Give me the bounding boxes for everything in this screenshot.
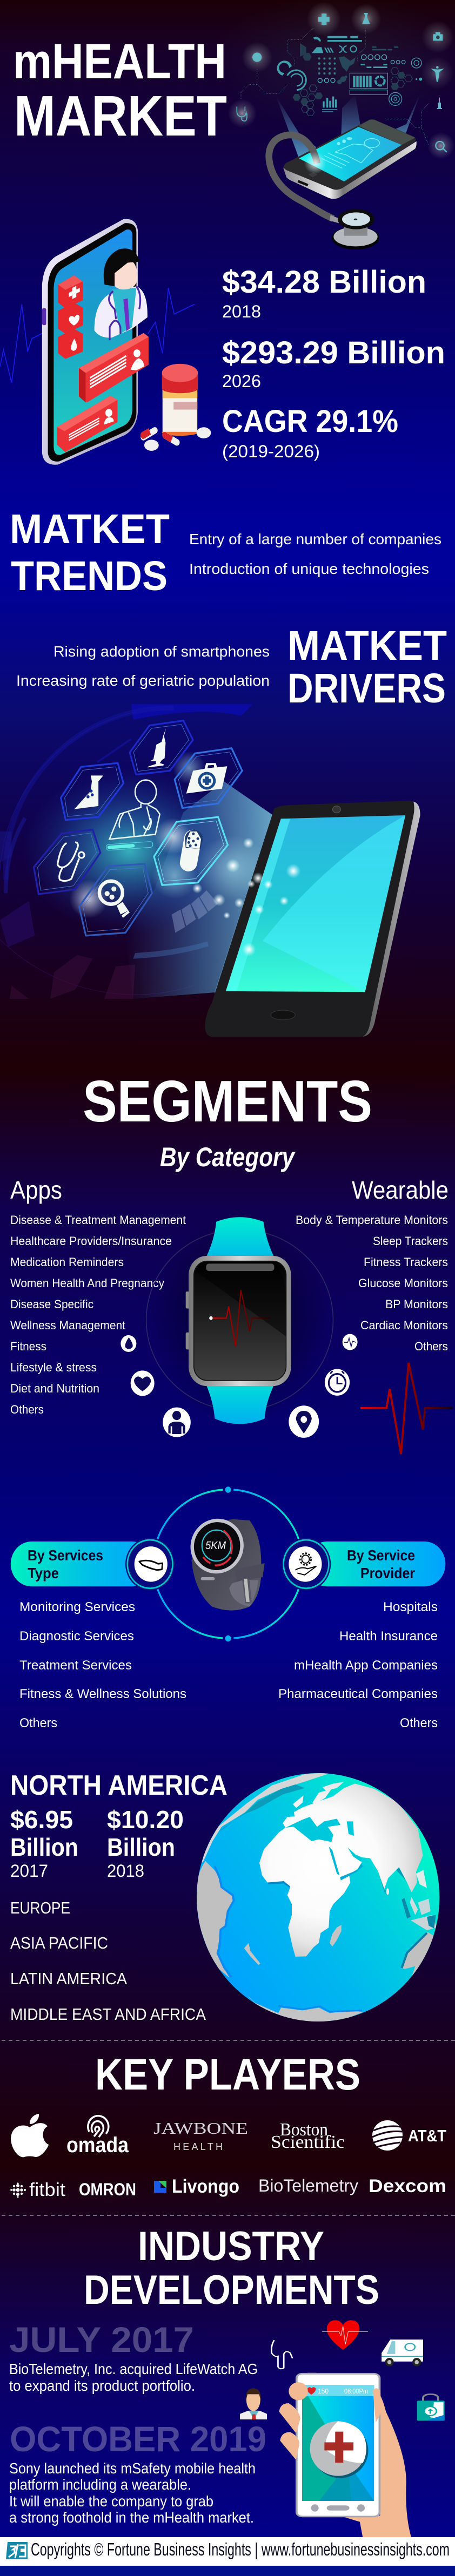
hologram doctor on screen [322,139,379,168]
market trends heading: TRENDS [11,553,168,599]
icon: doctor [109,780,160,839]
market size statistics: CAGR 29.1% [222,404,398,439]
industry developments heading [84,2223,379,2313]
services type list: Fitness & Wellness Solutions [19,1687,186,1701]
antarctica landmass [246,1994,363,2023]
key players heading: KEY PLAYERS [95,2050,360,2099]
october 2019 date: OCTOBER 2019 [10,2419,266,2459]
light beams from phone [276,93,420,158]
market size statistics: 2026 [222,371,261,391]
by service provider label: Provider [360,1565,415,1581]
key players logos [10,2114,446,2200]
icon: location pin [289,1405,319,1438]
hero: isometric phone and pills [0,219,211,465]
wearable heading: Wearable [352,1176,449,1204]
service provider list: Others [400,1716,438,1730]
market drivers heading: MATKET [287,623,447,669]
july 2017 description: BioTelemetry, Inc. acquired LifeWatch AG [9,2361,258,2377]
icon: smartphone with medical cross [297,2374,379,2517]
logo: jawbone health: JAWBONE [153,2119,248,2138]
particles and squares [172,837,300,956]
industry developments heading: INDUSTRY [138,2223,324,2269]
apps list: Women Health And Pregnancy [10,1276,164,1290]
logo: omron: OMRON [79,2180,136,2199]
market drivers list [16,643,270,689]
apps list: Diet and Nutrition [10,1382,99,1395]
north america 2017 value: 2017 [10,1861,48,1881]
southeast asia islands [402,1870,437,1930]
icon: capsule [178,828,203,873]
icon: first aid kit [186,763,227,794]
market size statistics [222,265,445,461]
icon: smartphone with hologram [283,119,417,199]
segments heading: SEGMENTS [83,1069,372,1134]
apps list: Lifestyle & stress [10,1361,97,1374]
hologram medical icons [57,728,227,918]
october 2019 description: platform including a wearable. [9,2476,191,2493]
apps list: Fitness [10,1340,46,1353]
icon: pulse [343,1334,358,1350]
north america 2017 value: Billion [10,1833,78,1861]
pulse line behind left phone [0,288,195,383]
other regions list: ASIA PACIFIC [10,1933,108,1952]
logo: omada [66,2116,129,2157]
wearable list: Others [414,1340,448,1353]
service provider list: Health Insurance [339,1629,438,1644]
mediterranean and inland seas [267,1817,410,1895]
by services type label: Type [28,1565,59,1581]
service provider list: Hospitals [383,1600,438,1614]
service provider list: mHealth App Companies [294,1658,438,1673]
hand fingers [279,2382,382,2460]
icon: gear in hand [296,1553,316,1575]
logo: at&t [372,2120,446,2151]
icon: person [163,1408,191,1437]
services type list: Others [19,1716,57,1730]
wearable list: Fitness Trackers [364,1255,448,1269]
main title [13,34,227,148]
icon: medical bag [417,2394,445,2421]
hexagon frames [34,721,242,936]
south america landmass [195,1861,234,1978]
south america coast shadow [215,1867,234,1977]
icon: water drop [121,1335,136,1352]
market drivers list: Increasing rate of geriatric population [16,672,270,689]
icon: isometric phone with doctor [42,219,149,465]
logo: omada: omada [66,2133,129,2157]
icon: stethoscope tube and chestpiece [269,135,379,249]
apps list: Wellness Management [10,1319,125,1332]
hero: holographic phone illustration [209,0,455,249]
lighter strip alongside tablet [214,814,280,993]
by category subheading: By Category [160,1142,296,1172]
phone status bar text: 08:00Pm [344,2387,368,2395]
market drivers list: Rising adoption of smartphones [53,643,270,660]
service provider list [278,1600,438,1730]
market trends list [189,531,441,577]
apps list: Medication Reminders [10,1255,124,1269]
services type list: Diagnostic Services [19,1629,134,1644]
apps list: Healthcare Providers/Insurance [10,1234,172,1248]
other regions list: MIDDLE EAST AND AFRICA [10,2005,206,2024]
glowing particles [192,837,300,956]
icon: pill bottle and tablets [139,364,211,451]
north america landmass [202,1773,331,1863]
north america 2018 value: 2018 [107,1861,144,1881]
category illustration: smartwatch [121,1214,453,1454]
wearable list: Body & Temperature Monitors [296,1213,448,1227]
apps heading: Apps [10,1176,62,1204]
icon: tablet device [205,801,420,1037]
wearable list: Cardiac Monitors [360,1319,448,1332]
north america heading: NORTH AMERICA [10,1770,228,1801]
phone status bar text: 150 [318,2387,329,2395]
october 2019 description: It will enable the company to grab [9,2493,213,2510]
icon: flask [74,775,103,809]
wearable list: Sleep Trackers [373,1234,448,1248]
other regions list: LATIN AMERICA [10,1969,127,1988]
ecg pulse line [360,1363,453,1454]
by services type label [28,1547,103,1581]
by services type pill [11,1538,175,1591]
october 2019 description: a strong foothold in the mHealth market. [9,2509,254,2526]
HUD dotted connectors [241,28,429,145]
icon: stopwatch [325,1369,350,1396]
market size statistics: $293.29 Billion [222,335,445,370]
logo: fitbit [10,2180,66,2200]
icon: stethoscope [271,2340,292,2369]
by services type label: By Services [28,1547,103,1564]
particle squares [172,890,218,932]
icon: sports watch [183,1511,265,1611]
logo: jawbone health [153,2119,248,2152]
wearable list: BP Monitors [385,1297,448,1311]
orbit ring [157,1486,299,1641]
icon: open hand [139,1560,163,1570]
watch orbit ring and shadow [146,1214,333,1425]
icon: stethoscope [57,842,84,881]
sri lanka and european islands [293,1782,389,1895]
icon: ambulance [382,2340,423,2367]
apps list: Disease & Treatment Management [10,1213,186,1227]
market trends heading: MATKET [10,506,170,552]
logo: boston scientific: Scientific [271,2132,345,2152]
market size statistics: 2018 [222,302,261,321]
services type list: Treatment Services [19,1658,132,1673]
services section graphics [11,1486,445,1641]
antarctic coast [278,2006,362,2012]
drivers illustration: hologram and tablet [0,704,420,1037]
background HUD arcs [0,704,253,999]
market trends list: Introduction of unique technologies [189,560,429,577]
industry developments heading: DEVELOPMENTS [84,2267,379,2313]
icon: syringe [148,728,166,767]
loading bar [106,841,153,850]
by service provider label [347,1547,415,1581]
footer band [0,2537,455,2576]
icon: heart [131,1370,155,1396]
icon: doctor avatar [240,2388,267,2419]
service provider list: Pharmaceutical Companies [278,1687,438,1701]
logo: dexcom: Dexcom [369,2176,446,2196]
other regions list [10,1898,206,2024]
hologram panel [0,704,280,999]
by service provider pill [282,1538,445,1591]
light beam from tablet [125,781,280,999]
logo: jawbone health: HEALTH [173,2141,223,2152]
doctor avatar [95,248,148,340]
afro-eurasia landmass [259,1783,423,1957]
australia landmass [401,1932,435,1977]
logo: apple [11,2114,49,2157]
icon: heart with ecg [322,2320,368,2350]
north america 2018 value [107,1806,184,1881]
market trends list: Entry of a large number of companies [189,531,441,547]
july 2017 description [9,2361,258,2394]
logo: biotelemetry: BioTelemetry [258,2176,358,2195]
logo: livongo: Livongo [172,2176,239,2197]
market drivers heading [287,623,447,712]
logo: boston scientific [271,2120,345,2152]
red info panels [57,333,149,452]
regional globe [195,1773,439,2023]
logo: fitbit: fitbit [29,2180,66,2200]
july 2017 date: JULY 2017 [9,2320,194,2359]
HUD haze glow [209,0,455,130]
coastal shelf [219,1784,305,1832]
footer logo [6,2542,28,2559]
logo: boston scientific: Boston [280,2120,328,2140]
wearable list [296,1213,448,1353]
market trends heading [10,506,170,599]
october 2019 description: Sony launched its mSafety mobile health [9,2460,256,2477]
north america 2018 value: $10.20 [107,1806,184,1834]
icon: smartwatch [186,1217,291,1424]
hand behind phone [307,2373,411,2537]
north america 2018 value: Billion [107,1833,175,1861]
HUD floating medical icons [228,2,454,159]
north america 2017 value [10,1806,78,1881]
apps list: Others [10,1403,44,1416]
logo: at&t: AT&T [408,2126,446,2145]
wearable list: Glucose Monitors [358,1276,448,1290]
australia coast [402,1933,427,1968]
apps list [10,1213,186,1416]
main title: MARKET [14,84,227,148]
july 2017 description: to expand its product portfolio. [9,2377,195,2394]
october 2019 description [9,2460,256,2526]
red icon cards [58,275,83,359]
by service provider label: By Service [347,1547,415,1564]
icon: magnifier [99,881,130,918]
other regions list: EUROPE [10,1898,70,1917]
market size statistics: $34.28 Billion [222,265,426,300]
services type list [19,1600,186,1730]
developments illustration [240,2320,445,2537]
HUD data graphics [277,36,422,116]
services type list: Monitoring Services [19,1600,135,1614]
phone status bar text [318,2387,368,2395]
north america 2017 value: $6.95 [10,1806,73,1834]
market size statistics: (2019-2026) [222,442,320,461]
5KM watch readout: 5KM [205,1540,226,1552]
madagascar and islands [244,1925,342,1965]
hologram glows [21,752,269,934]
main title: mHEALTH [13,34,226,89]
apps list: Disease Specific [10,1297,93,1311]
